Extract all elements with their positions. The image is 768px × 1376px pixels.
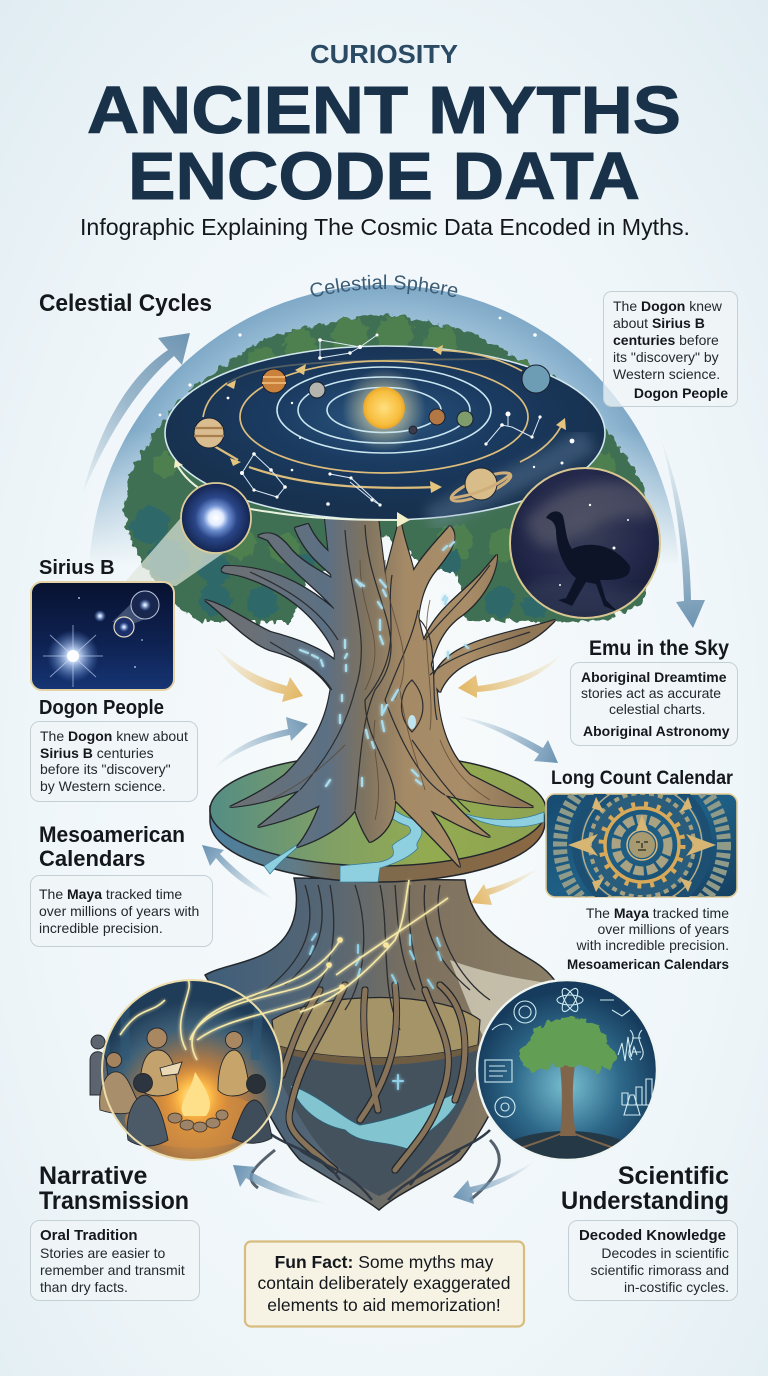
card: Oral Tradition: Oral Tradition	[40, 1227, 138, 1244]
heading: Sirius B: Sirius B	[39, 557, 115, 579]
clouds	[525, 482, 660, 547]
card: Dogon left: The Dogon knew about	[40, 728, 188, 744]
card: Maya left: over millions of years with	[39, 903, 199, 919]
arrow: blue to trunk	[212, 717, 308, 770]
emu silhouette	[546, 511, 630, 612]
constellations	[242, 335, 540, 505]
gold orbits	[203, 350, 564, 488]
sun	[363, 387, 405, 429]
card: Oral Tradition	[30, 1220, 200, 1300]
curved label: celestial sphere: Celestial Sphere	[310, 274, 458, 297]
glyphs	[310, 934, 441, 1089]
Sirius B lens	[181, 483, 251, 553]
subtitle: Infographic Explaining The Cosmic Data Encoded in Myths.	[80, 214, 690, 240]
saturn	[448, 468, 514, 506]
card: Dogon top right: Western science.	[613, 366, 720, 382]
tree canopy	[125, 315, 652, 622]
card: Aboriginal	[570, 662, 738, 746]
white rim arrows	[174, 460, 410, 527]
Narrative campfire scene	[90, 980, 282, 1160]
heading: Scientific Understanding: Scientific	[618, 1162, 729, 1190]
card: Aboriginal: Aboriginal Dreamtime	[581, 669, 727, 685]
heading: Narrative Transmission: Narrative	[39, 1162, 147, 1190]
left limbs	[205, 600, 340, 702]
heading: Emu in the Sky: Emu in the Sky	[589, 637, 729, 660]
right limbs	[432, 620, 555, 692]
heading: Mesoamerican Calendars: Mesoamerican	[39, 822, 185, 847]
people	[90, 1028, 272, 1146]
lower trunk and inverted roots	[205, 878, 558, 1210]
arrow: blue bottom left	[233, 1165, 328, 1204]
orbits	[277, 367, 491, 453]
arrow: blue to mesoamerican	[202, 845, 275, 900]
pool	[290, 1085, 462, 1150]
card: Dogon top right	[604, 292, 738, 406]
panel: Sirius B image	[31, 582, 174, 690]
card: Aboriginal: Aboriginal Astronomy	[583, 723, 730, 739]
heading: Dogon People: Dogon People	[39, 697, 164, 719]
callout: fun fact: elements to aid memorization!	[267, 1295, 501, 1315]
text: Maya right: Mesoamerican Calendars	[567, 956, 729, 972]
main title line 2: ENCODE DATA	[128, 139, 640, 214]
arrow: gold left	[214, 645, 303, 702]
card: Oral Tradition: than dry facts.	[40, 1279, 128, 1295]
card: Decoded Knowledge: scientific rimorass and	[590, 1262, 729, 1278]
heading: Long Count Calendar: Long Count Calendar	[551, 768, 734, 789]
heading: Mesoamerican Calendars	[39, 822, 185, 871]
arrow: gold right	[458, 650, 566, 698]
card: Oral Tradition: Stories are easier to	[40, 1245, 165, 1261]
arrow: celestial cycles up	[82, 333, 190, 495]
text: Maya right: with incredible precision.	[575, 937, 729, 953]
callout: fun fact: Fun Fact: Some myths may	[275, 1252, 494, 1272]
mound	[512, 1131, 622, 1159]
main trunk with roots	[230, 518, 533, 867]
card: Aboriginal: celestial charts.	[609, 701, 705, 717]
main title line 1: ANCIENT MYTHS	[87, 73, 681, 148]
arrow: blue bottom right	[453, 1160, 536, 1204]
glowing story strands	[120, 880, 448, 1060]
card: Dogon left: Sirius B centuries	[40, 745, 154, 761]
card: Dogon top right: about Sirius B	[613, 315, 705, 331]
card: Dogon left	[30, 722, 198, 802]
card: Maya left	[30, 876, 212, 946]
neck strands	[250, 885, 490, 1030]
card: Dogon top right: centuries before	[613, 332, 719, 348]
card: Dogon top right: its "discovery" by	[613, 349, 719, 365]
stones	[168, 1110, 228, 1132]
card: Decoded Knowledge: Decodes in scientific	[601, 1245, 729, 1261]
tree	[560, 1065, 576, 1136]
card: Maya left: incredible precision.	[39, 920, 163, 936]
trunk knot glow	[408, 715, 416, 729]
science icons	[485, 986, 656, 1117]
grass top	[210, 754, 546, 866]
callout: fun fact: contain deliberately exaggerated	[258, 1273, 510, 1293]
Scientific understanding circle	[476, 980, 656, 1159]
orbit arrowheads	[226, 345, 566, 493]
upper trunk and branches	[205, 518, 555, 867]
card: Maya left: The Maya tracked time	[39, 886, 182, 902]
heading: celestial cycles: Celestial Cycles	[39, 290, 212, 317]
card: Dogon top right: Dogon People	[634, 385, 728, 401]
pale stone band	[450, 960, 558, 1070]
arrow: down to emu	[660, 435, 705, 628]
card: Decoded Knowledge	[568, 1220, 738, 1300]
text: Maya right: over millions of years	[598, 921, 729, 937]
card: Aboriginal: stories act as accurate	[581, 685, 721, 701]
lower silhouette	[205, 878, 558, 1210]
sky disk: solar system	[165, 334, 605, 527]
heading: Scientific Understanding: Understanding	[561, 1187, 729, 1215]
disk	[165, 346, 605, 520]
lower roots dark	[265, 1130, 490, 1200]
hanging roots	[282, 985, 465, 1170]
cavern	[268, 1050, 485, 1196]
celestial dome	[89, 285, 679, 580]
milky band	[430, 440, 590, 520]
pale light beam to Sirius panel	[125, 512, 228, 586]
sun glow	[342, 368, 426, 452]
soil ledge	[272, 998, 480, 1058]
bark highlights	[270, 560, 490, 820]
icon arrows	[82, 333, 705, 1204]
card: Decoded Knowledge: in-costific cycles.	[624, 1279, 729, 1295]
text: Maya right: The Maya tracked time	[586, 905, 729, 921]
heading: Narrative Transmission: Transmission	[39, 1187, 189, 1215]
title block	[80, 41, 690, 240]
arrow: gold from calendar	[471, 867, 540, 905]
rivers	[264, 803, 544, 882]
text: Maya right	[567, 905, 729, 972]
glowing runes on trunk	[300, 542, 468, 786]
stars	[227, 334, 574, 507]
card: Dogon left: by Western science.	[40, 778, 166, 794]
floating earth disk	[210, 754, 546, 882]
card: Decoded Knowledge: Decoded Knowledge	[579, 1227, 726, 1244]
Emu in the sky lens	[510, 468, 660, 620]
callout: fun fact	[245, 1242, 524, 1326]
card: Dogon left: before its "discovery"	[40, 761, 171, 777]
card: Oral Tradition: remember and transmit	[40, 1262, 185, 1278]
heading: Scientific Understanding	[561, 1162, 729, 1215]
card: Dogon top right: The Dogon knew	[613, 298, 723, 314]
heading: Mesoamerican Calendars: Calendars	[39, 846, 145, 871]
arrow: blue to calendar	[455, 716, 558, 763]
heading: Narrative Transmission	[39, 1162, 189, 1215]
kicker: CURIOSITY	[310, 41, 458, 69]
solid canopy base	[125, 315, 652, 622]
panel: Long Count Calendar image	[545, 793, 738, 898]
rim	[210, 806, 545, 882]
bark grain lines	[250, 525, 530, 812]
planets	[194, 365, 550, 448]
fire	[164, 1065, 226, 1124]
